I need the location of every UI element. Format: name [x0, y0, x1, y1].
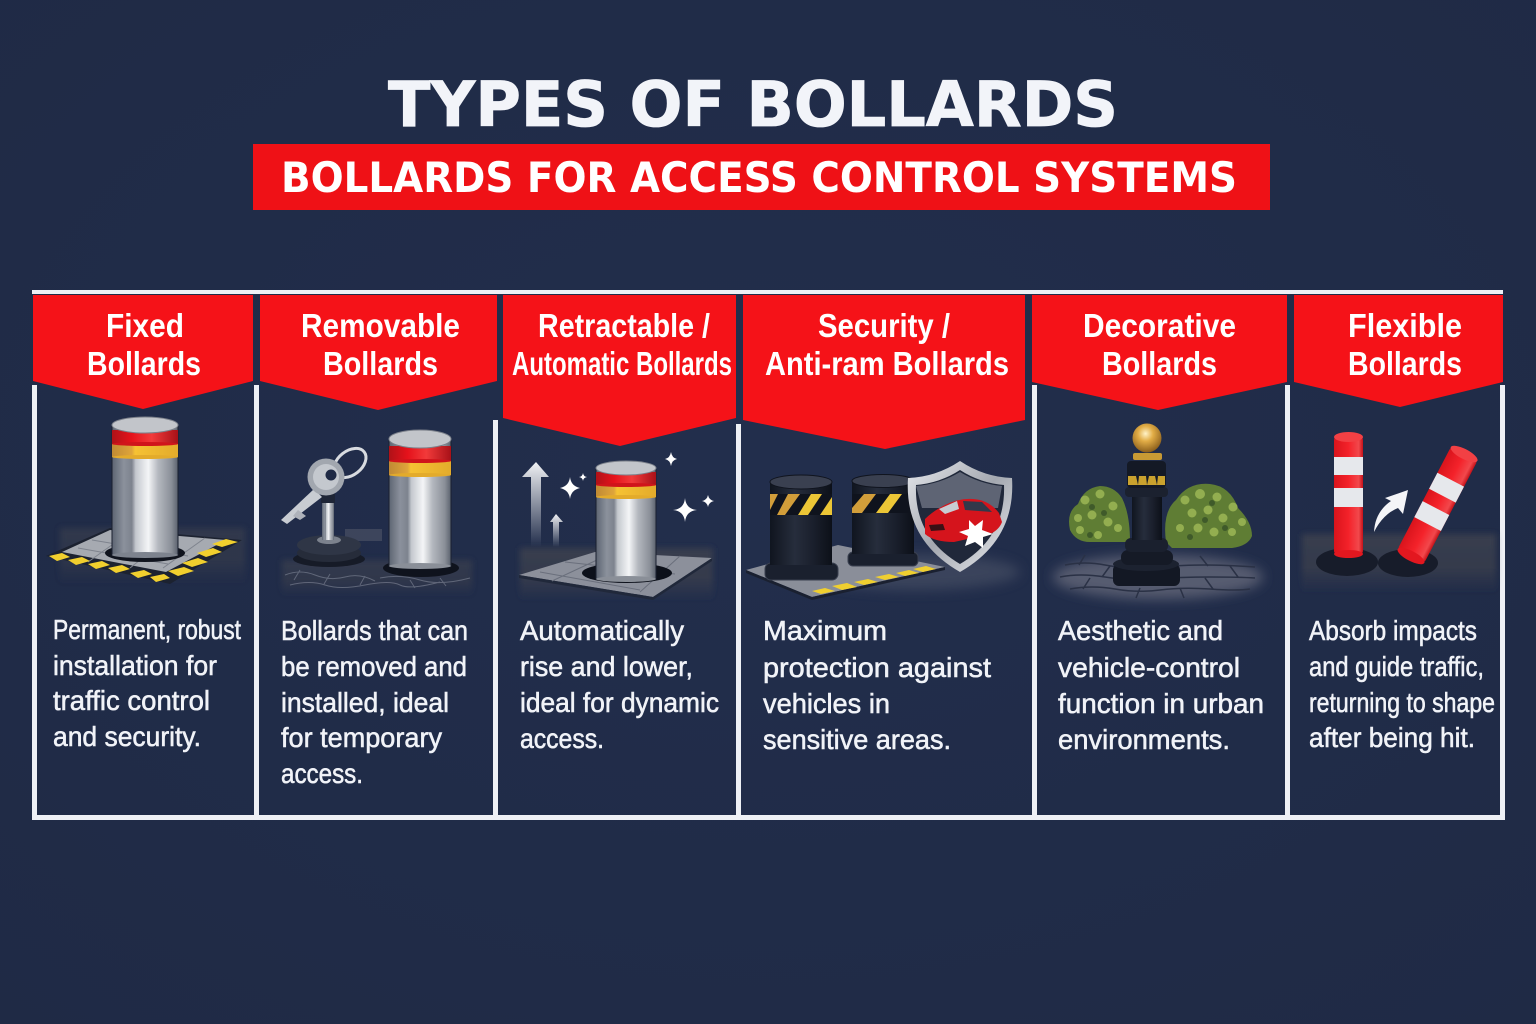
description: fixed bollards: traffic control [53, 685, 210, 716]
description: removable bollards: installed, ideal [281, 687, 449, 718]
icon: flexible bollards with arrow [1302, 432, 1496, 592]
header: decorative bollards [1032, 295, 1287, 410]
table frame [32, 290, 1505, 820]
panel: retractable bollards [503, 295, 736, 754]
description: fixed bollards: and security. [53, 721, 201, 752]
shield with car [908, 461, 1012, 572]
header: decorative bollards: Decorative [1083, 307, 1236, 344]
description: decorative bollards: Aesthetic and [1058, 615, 1223, 646]
header: fixed bollards [33, 295, 253, 409]
bend arrow [1374, 490, 1408, 532]
bent post [1395, 443, 1480, 567]
description: fixed bollards: Permanent, robust [53, 614, 241, 645]
description: decorative bollards [1058, 615, 1264, 755]
description: removable bollards: for temporary [281, 722, 442, 753]
title: TYPES OF BOLLARDS [388, 68, 1118, 141]
description: flexible bollards: returning to shape [1309, 687, 1495, 718]
header: flexible bollards [1294, 295, 1503, 407]
black post [1113, 424, 1180, 586]
description: security bollards: vehicles in [763, 688, 890, 719]
header: security bollards: Anti-ram Bollards [765, 345, 1009, 382]
panel: removable bollards [260, 295, 497, 789]
description: security bollards: protection against [763, 652, 991, 683]
icon: decorative bollard with bushes [1053, 424, 1263, 599]
header: security bollards [743, 295, 1025, 449]
key stand [293, 494, 365, 567]
subtitle banner [253, 144, 1270, 210]
description: retractable bollards: rise and lower, [520, 651, 693, 682]
front bollard [765, 475, 838, 580]
icon: retractable bollard with arrows and sparkles [519, 452, 714, 600]
description: removable bollards [281, 615, 468, 789]
header: removable bollards: Bollards [323, 345, 438, 382]
header: flexible bollards: Flexible [1348, 307, 1462, 344]
upright post [1334, 432, 1363, 558]
description: removable bollards: be removed and [281, 651, 467, 682]
description: flexible bollards: Absorb impacts [1309, 615, 1477, 646]
description: retractable bollards: Automatically [520, 615, 684, 646]
description: retractable bollards: ideal for dynamic [520, 687, 719, 718]
icon: fixed bollard on hazard plate [46, 417, 245, 584]
up arrows [522, 462, 563, 547]
description: removable bollards: access. [281, 758, 363, 789]
header: decorative bollards: Bollards [1102, 345, 1217, 382]
description: fixed bollards [53, 614, 241, 752]
header: fixed bollards: Fixed [106, 307, 184, 344]
subtitle banner: BOLLARDS FOR ACCESS CONTROL SYSTEMS [281, 153, 1237, 202]
description: security bollards [763, 615, 991, 755]
description: flexible bollards: after being hit. [1309, 722, 1475, 753]
description: removable bollards: Bollards that can [281, 615, 468, 646]
header: retractable bollards: Retractable / [538, 307, 710, 344]
icon: anti-ram bollards and shield [746, 461, 1020, 600]
panel: decorative bollards [1032, 295, 1287, 755]
sparkles [560, 452, 714, 522]
header: flexible bollards: Bollards [1348, 345, 1462, 382]
bushes [1069, 484, 1252, 548]
description: security bollards: Maximum [763, 615, 887, 646]
header: fixed bollards: Bollards [87, 345, 201, 382]
description: flexible bollards: and guide traffic, [1309, 651, 1484, 682]
description: decorative bollards: vehicle-control [1058, 652, 1240, 683]
description: security bollards: sensitive areas. [763, 724, 951, 755]
panel: flexible bollards [1294, 295, 1503, 753]
description: retractable bollards [520, 615, 719, 754]
rear bollard [848, 474, 918, 566]
icon: key stand and removable bollard [281, 430, 472, 595]
header: retractable bollards [503, 295, 736, 446]
description: fixed bollards: installation for [53, 650, 217, 681]
header: retractable bollards: Automatic Bollards [512, 345, 732, 382]
header: removable bollards: Removable [301, 307, 460, 344]
description: decorative bollards: function in urban [1058, 688, 1264, 719]
description: retractable bollards: access. [520, 723, 604, 754]
key [281, 442, 372, 524]
description: decorative bollards: environments. [1058, 724, 1230, 755]
header: removable bollards [260, 295, 497, 410]
header: security bollards: Security / [818, 307, 950, 344]
panel: security bollards [743, 295, 1025, 755]
panel: fixed bollards [33, 295, 253, 752]
description: flexible bollards [1309, 615, 1495, 753]
